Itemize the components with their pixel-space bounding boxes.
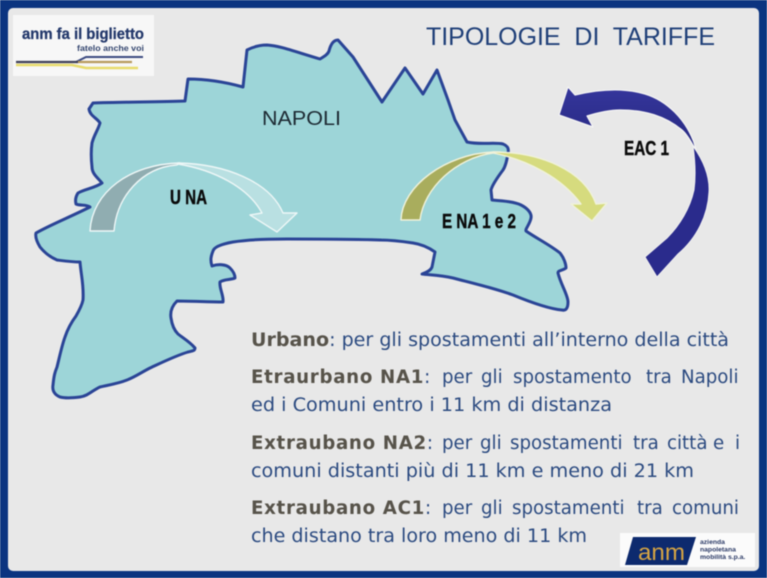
description: Extraubano AC1: Extraubano AC1	[251, 498, 425, 519]
description: Extraubano AC1: che distano tra loro meno di 11 km	[251, 526, 587, 547]
logo: anm azienda napoletana mobilità: anm	[638, 539, 685, 565]
map label: NAPOLI: NAPOLI	[262, 108, 341, 130]
logo: anm azienda napoletana mobilità: mobilità s.p.a.	[700, 554, 745, 561]
description: Etraurbano NA1: gli	[481, 367, 503, 388]
description: Etraurbano NA1	[251, 367, 739, 416]
description: Extraubano NA2: Extraubano NA2	[251, 433, 427, 454]
description: Etraurbano NA1: spostamento	[513, 367, 632, 388]
logo: anm fa il biglietto: anm fa il biglietto	[22, 26, 144, 43]
logo: anm fa il biglietto: fatelo anche voi	[77, 43, 144, 53]
description: Extraubano AC1: spostamenti	[512, 498, 625, 519]
title: TIPOLOGIE DI TARIFFE	[426, 23, 715, 51]
arrow label: U NA: U NA	[170, 187, 207, 209]
description: Extraubano AC1: comuni	[672, 498, 739, 519]
description: Etraurbano NA1: Etraurbano NA1	[251, 367, 424, 388]
description: Urbano: Urbano: per gli spostamenti all’interno della città	[251, 330, 729, 351]
description: Extraubano AC1: tra	[637, 498, 663, 519]
description: Extraubano NA2: città	[667, 433, 707, 454]
logo: anm azienda napoletana mobilità: azienda	[700, 539, 725, 546]
description: Extraubano NA2: e	[713, 433, 724, 454]
description: Extraubano NA2: gli	[480, 433, 502, 454]
map: Napoli area	[36, 40, 568, 398]
logo: anm azienda napoletana mobilità	[620, 533, 755, 567]
arrow: UNA	[90, 163, 297, 232]
description: Extraubano AC1: gli	[481, 498, 503, 519]
description: Extraubano NA2: i	[735, 433, 740, 454]
text block: tariff descriptions	[251, 330, 740, 547]
logo: anm azienda napoletana mobilità: napoletana	[700, 546, 736, 554]
arrow label: E NA 1 e 2: E NA 1 e 2	[442, 211, 516, 233]
description: Etraurbano NA1: ed i Comuni entro i 11 km di distanza	[251, 395, 612, 416]
description: Extraubano NA2: tra	[633, 433, 659, 454]
description: Extraubano NA2: :	[427, 433, 433, 454]
description: Extraubano NA2: per	[442, 433, 473, 454]
description: Etraurbano NA1: per	[442, 367, 473, 388]
description: Etraurbano NA1: Napoli	[681, 367, 739, 388]
arrow label: EAC 1: EAC 1	[624, 138, 669, 160]
description: Extraubano AC1: :	[425, 498, 431, 519]
description: Extraubano NA2	[251, 433, 740, 482]
description: Extraubano NA2: comuni distanti più di 11 km e meno di 21 km	[251, 461, 694, 482]
logo: anm fa il biglietto	[13, 15, 154, 76]
description: Extraubano AC1: per	[442, 498, 473, 519]
description: Extraubano NA2: spostamenti	[510, 433, 623, 454]
description: Extraubano AC1	[251, 498, 739, 547]
arrow: EAC 1	[559, 87, 709, 277]
description: Etraurbano NA1: tra	[646, 367, 672, 388]
description: Etraurbano NA1: :	[424, 367, 430, 388]
arrow: ENA 1 e 2	[401, 152, 607, 221]
